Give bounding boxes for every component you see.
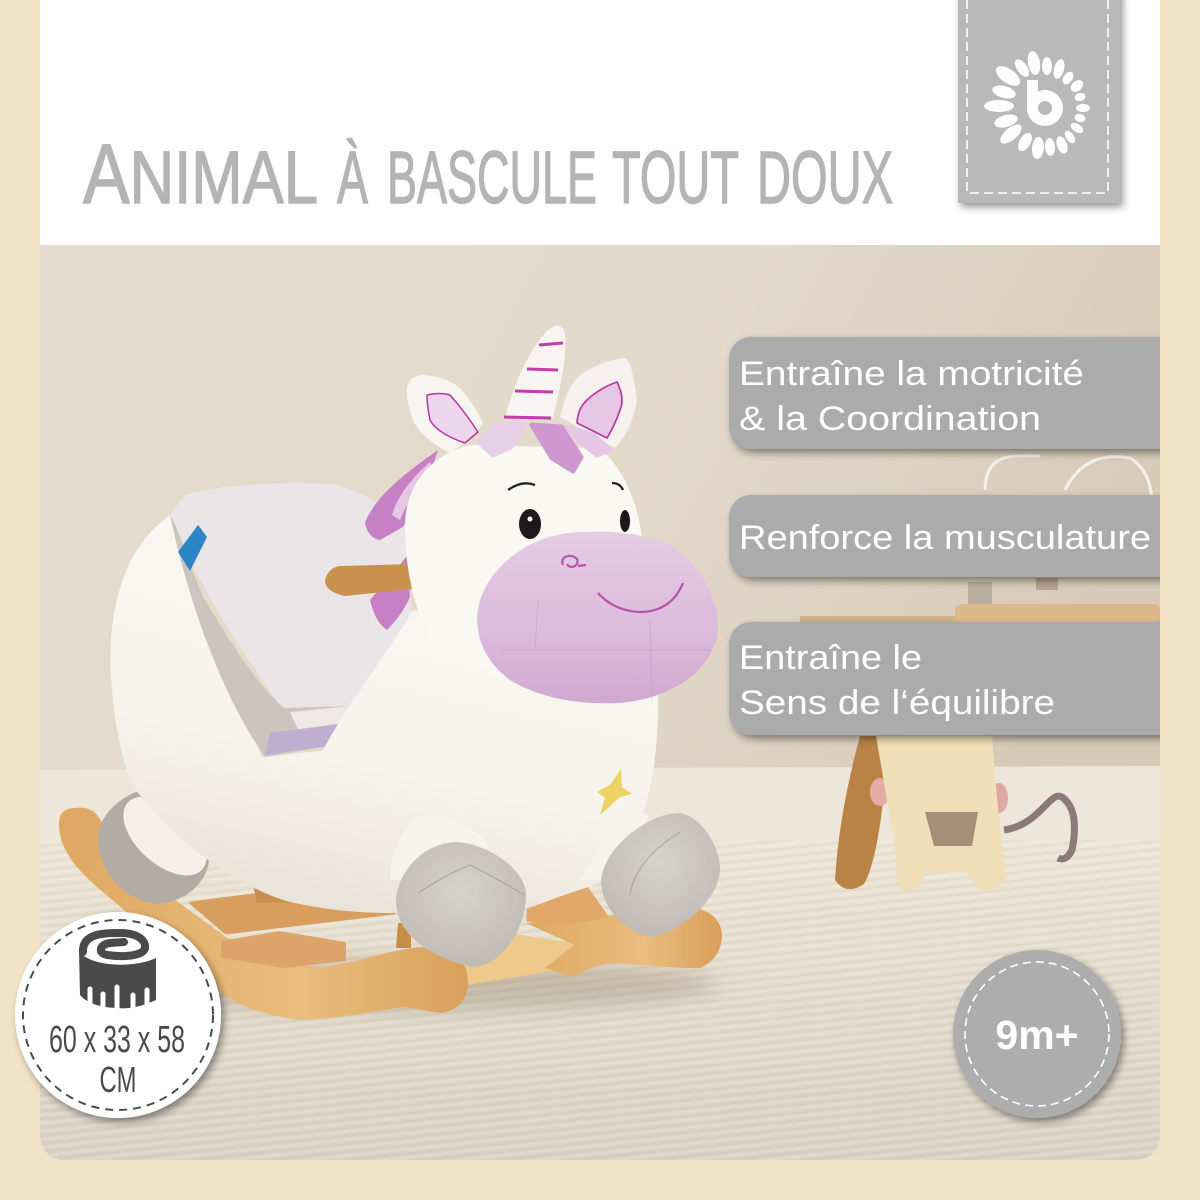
callout: équilibre: Entraîne le <box>739 639 922 677</box>
title: BASCULE <box>387 136 597 219</box>
title: TOUT <box>612 136 739 219</box>
ears <box>407 358 637 453</box>
seat pad <box>290 706 350 730</box>
baseboard <box>40 766 1160 842</box>
muzzle <box>477 532 718 703</box>
callout: équilibre <box>729 622 1180 735</box>
callout: équilibre: Sens de l‘équilibre <box>739 684 1055 722</box>
badge: age 9m+: 9m+ <box>995 1012 1079 1058</box>
carpet <box>40 840 1160 1160</box>
badge: dimensions: 60 x 33 x 58 <box>49 1019 185 1061</box>
forelock <box>479 424 610 471</box>
rocker base <box>59 808 722 1020</box>
blue label <box>178 525 207 571</box>
horn <box>504 326 565 418</box>
callout: motricité <box>729 337 1180 449</box>
star <box>597 769 632 815</box>
brand tag with logo <box>958 0 1120 203</box>
title: DOUX <box>757 136 893 219</box>
stool leg and plush toy <box>835 736 1074 891</box>
callout: musculature <box>729 495 1180 577</box>
badge: age 9m+ <box>953 950 1121 1118</box>
logo: flower petals and b <box>984 50 1090 159</box>
callout: motricité: Entraîne la motricité <box>739 355 1084 393</box>
panel: product photo <box>40 245 1160 1160</box>
eyes and brows <box>508 483 630 539</box>
rear foot <box>97 792 209 904</box>
badge: dimensions: CM <box>100 1059 136 1100</box>
front feet <box>396 813 720 967</box>
smile and nostril <box>562 556 683 612</box>
floor shadow <box>120 959 720 1011</box>
title: ANIMAL <box>83 127 318 221</box>
illustration: unicorn rocking seat <box>59 326 722 1020</box>
seat and body <box>110 515 588 913</box>
callout: musculature: Renforce la musculature <box>739 519 1151 557</box>
callout: motricité: & la Coordination <box>739 400 1041 438</box>
title: À <box>337 136 368 219</box>
icon: measuring tape <box>79 933 156 1012</box>
title <box>83 127 893 221</box>
wooden handle <box>325 564 412 596</box>
mane back <box>365 450 438 630</box>
front leg cuffs <box>391 810 649 880</box>
muzzle seam <box>500 600 710 700</box>
white header band <box>40 0 1160 245</box>
seat back cushion <box>170 483 412 712</box>
head <box>405 445 642 623</box>
badge: dimensions <box>15 912 221 1118</box>
rear cuff <box>123 796 206 876</box>
toy table in background <box>800 456 1160 623</box>
seat grey rim <box>170 515 352 757</box>
neck and belly <box>298 610 658 913</box>
